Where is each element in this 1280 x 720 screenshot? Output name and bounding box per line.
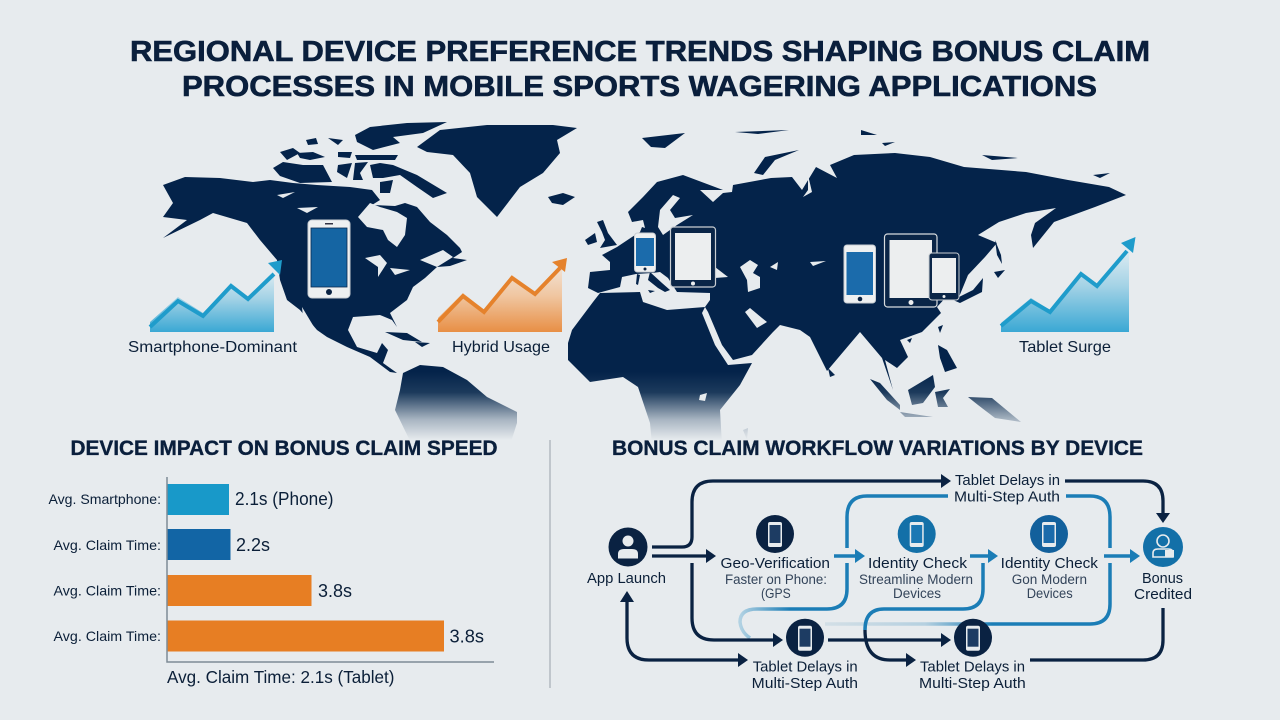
bar chart: claim speed: 2.1s (Phone) bbox=[235, 489, 334, 509]
node: tablet delays right: Multi-Step Auth bbox=[919, 675, 1026, 692]
node: geo-verification: Faster on Phone: bbox=[725, 572, 827, 587]
label: top tablet delays: Multi-Step Auth bbox=[954, 488, 1060, 506]
heading: device impact: DEVICE IMPACT ON BONUS CLAIM SPEED bbox=[70, 437, 498, 460]
bar chart: claim speed: 3.8s bbox=[318, 581, 352, 601]
bar chart: claim speed: 2.2s bbox=[236, 535, 270, 555]
label: top tablet delays: Tablet Delays in bbox=[955, 472, 1060, 489]
node: identity check one: Streamline Modern bbox=[859, 572, 973, 587]
inland seas bbox=[277, 175, 826, 401]
label: top tablet delays bbox=[954, 472, 1060, 506]
title: REGIONAL DEVICE PREFERENCE TRENDS SHAPING BONUS CLAIM bbox=[130, 36, 1150, 68]
node: identity check one: Devices bbox=[893, 586, 941, 601]
icon: Asia small tablet bbox=[929, 253, 959, 300]
node: identity check one: Identity Check bbox=[868, 555, 968, 572]
world map bbox=[163, 122, 1126, 445]
icon: North America smartphone bbox=[308, 220, 350, 298]
node: identity check one bbox=[859, 515, 973, 601]
icon: Europe tablet bbox=[670, 227, 716, 287]
icon: Asia tablet bbox=[884, 234, 937, 307]
blue arrowheads bbox=[855, 549, 1140, 563]
node: bonus credited: Credited bbox=[1134, 586, 1192, 603]
dark arrowheads bbox=[620, 474, 1170, 667]
chart: tablet surge: Tablet Surge bbox=[1019, 339, 1111, 356]
node: app launch: App Launch bbox=[587, 570, 666, 587]
Greenland bbox=[417, 125, 577, 217]
node: identity check two: Gon Modern bbox=[1012, 572, 1087, 587]
icon: Europe smartphone bbox=[634, 233, 656, 272]
chart: smartphone-dominant: Smartphone-Dominant bbox=[128, 339, 298, 356]
title bbox=[130, 36, 1150, 103]
node: bonus credited bbox=[1134, 527, 1192, 603]
title: PROCESSES IN MOBILE SPORTS WAGERING APPLICATIONS bbox=[182, 71, 1097, 103]
node: bonus credited: Bonus bbox=[1142, 570, 1183, 587]
blue connectors bbox=[740, 496, 1130, 638]
Arctic islands bbox=[273, 122, 447, 198]
chart: tablet surge bbox=[1001, 237, 1136, 356]
icon: Asia smartphone bbox=[844, 245, 876, 303]
bar chart: claim speed bbox=[48, 477, 494, 687]
bar chart: claim speed: Avg. Claim Time: 2.1s (Tablet) bbox=[167, 667, 394, 687]
node: geo-verification bbox=[720, 515, 830, 601]
node: tablet delays left: Tablet Delays in bbox=[753, 659, 858, 676]
dark connectors bbox=[627, 481, 1163, 660]
bar chart: claim speed: Avg. Claim Time: bbox=[54, 628, 161, 644]
chart: hybrid usage bbox=[438, 258, 567, 356]
node: tablet delays left bbox=[752, 619, 858, 692]
node: geo-verification: (GPS bbox=[761, 586, 791, 601]
bar chart: claim speed: 3.8s bbox=[450, 626, 484, 646]
node: identity check two: Identity Check bbox=[1001, 555, 1099, 572]
bar chart: claim speed: Avg. Smartphone: bbox=[48, 491, 161, 507]
node: tablet delays right: Tablet Delays in bbox=[920, 659, 1025, 676]
node: identity check two: Devices bbox=[1027, 586, 1073, 601]
flowchart: bonus claim workflow bbox=[587, 472, 1192, 692]
bar chart: claim speed: Avg. Claim Time: bbox=[54, 582, 161, 598]
Eurasia bbox=[588, 153, 1126, 390]
node: geo-verification: Geo-Verification bbox=[720, 555, 830, 572]
node: tablet delays left: Multi-Step Auth bbox=[752, 675, 858, 692]
chart: hybrid usage: Hybrid Usage bbox=[452, 339, 550, 356]
South America bbox=[395, 365, 517, 445]
node: app launch bbox=[587, 528, 666, 587]
Africa bbox=[568, 292, 752, 445]
node: identity check two bbox=[1001, 515, 1099, 601]
bar chart: claim speed: Avg. Claim Time: bbox=[54, 537, 161, 553]
North America bbox=[163, 177, 467, 373]
chart: smartphone-dominant bbox=[128, 260, 298, 356]
islands of Europe and Asia bbox=[385, 130, 1110, 440]
heading: workflow: BONUS CLAIM WORKFLOW VARIATIONS BY DEVICE bbox=[612, 437, 1143, 460]
node: tablet delays right bbox=[919, 619, 1026, 692]
